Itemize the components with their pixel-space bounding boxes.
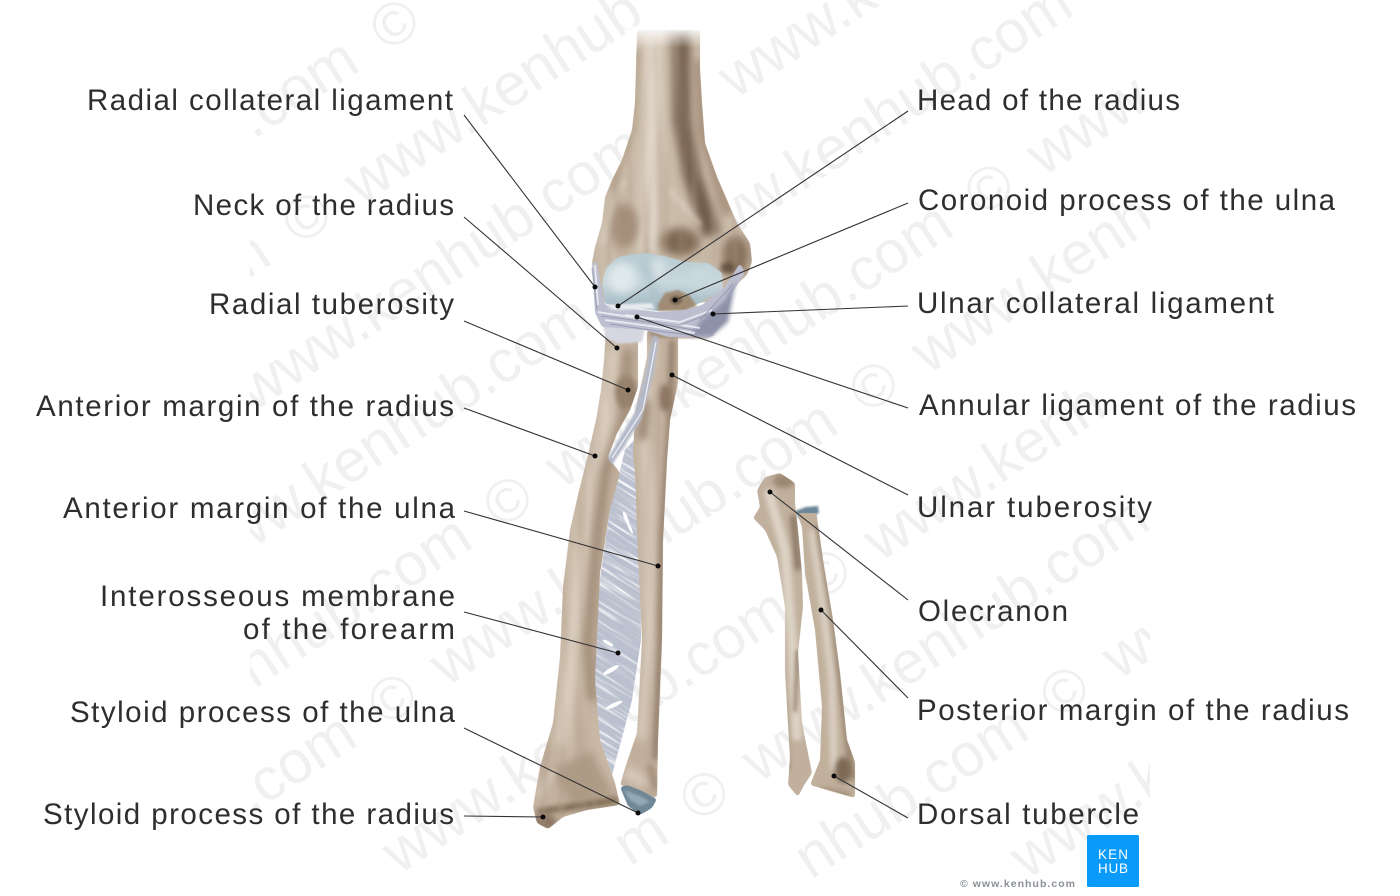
radius [533,333,638,828]
leader lines [464,111,908,818]
labels: left column: Interosseous membrane [100,580,455,613]
coronoid process [658,290,697,311]
ulna [620,331,678,798]
labels: left column [36,84,456,831]
illustration: small posterior view of radius and ulna [754,473,856,798]
articular cartilage of the ulnar head [620,785,657,815]
small radius [798,512,856,798]
oblique cord [608,335,659,465]
logo: Kenhub [1087,835,1139,887]
labels: left column: Anterior margin of the ulna [63,492,456,525]
labels: left column: Styloid process of the radius [43,798,454,831]
leader dots [540,284,836,820]
labels: right column: Head of the radius [917,84,1180,117]
watermark: www.kenhub.com © www.kenhub.com © www [51,61,1160,813]
labels: left column: Radial collateral ligament [87,84,453,117]
labels: right column: Annular ligament of the radius [919,389,1356,422]
illustration: forearm bones, anterior view [466,26,904,828]
membrane openings [602,512,633,710]
watermark: m © www.kenhub.com [601,482,1160,878]
labels: right column [917,84,1356,831]
small ulna [754,473,812,796]
watermark: hub.com © www.kenhub.com © www.kenhub [138,144,1220,880]
labels: right column: Coronoid process of the ulna [918,184,1336,217]
labels: left column: Radial tuberosity [209,288,454,321]
labels: left column: Styloid process of the ulna [70,696,456,729]
coronoid process bone below capsule [648,328,712,338]
logo: Kenhub: HUB [1098,861,1128,876]
labels: right column: Ulnar tuberosity [917,491,1152,524]
radial neck fibres under annular ligament [603,326,645,344]
interosseous membrane [595,440,641,774]
labels: right column: Ulnar collateral ligament [917,287,1274,320]
radial head edge [607,303,655,310]
labels: right column: Posterior margin of the radius [917,694,1349,727]
logo: Kenhub: KEN [1098,847,1128,862]
cartilage: trochlea and capitulum [602,253,723,311]
labels: left column: of the forearm [243,613,455,646]
labels: right column: Dorsal tubercle [917,798,1139,831]
watermark: nhub.com © www [782,564,1235,891]
humerus top fade [625,26,710,48]
labels: right column: Olecranon [918,595,1068,628]
labels: left column: Neck of the radius [193,189,454,222]
copyright: © www.kenhub.com [960,878,1075,890]
watermark: www.kenhub.com © www.kenh [369,368,1117,886]
labels: left column: Anterior margin of the radius [36,390,454,423]
small radial head cartilage [795,506,819,519]
watermark: www.k [997,740,1180,891]
joint capsule and ligaments [592,262,745,337]
humerus [592,30,752,310]
